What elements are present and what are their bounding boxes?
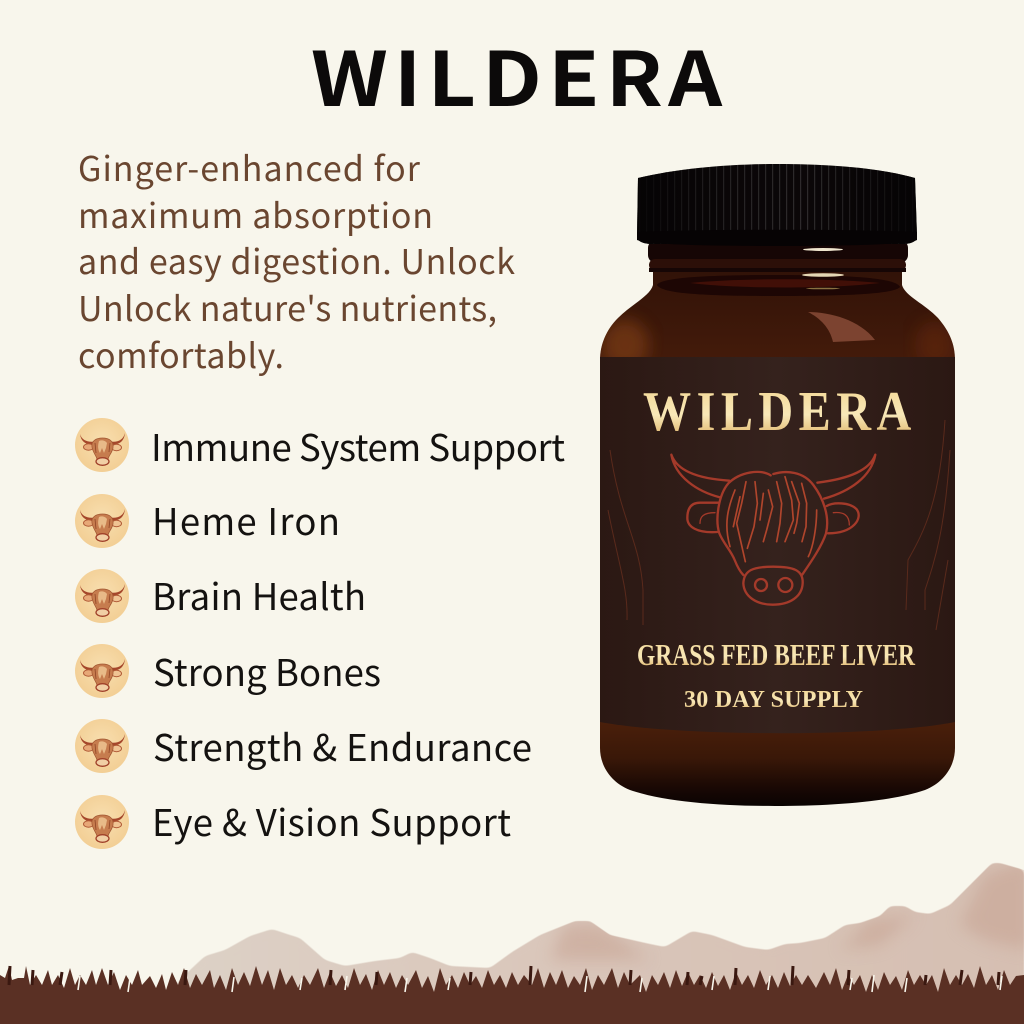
benefit: brain health: Brain Health [152, 568, 366, 621]
label [600, 357, 955, 733]
intro paragraph: Ginger-enhanced for [78, 142, 421, 191]
intro paragraph: and easy digestion. Unlock [78, 235, 515, 284]
mountains [175, 860, 1024, 995]
intro paragraph: comfortably. [78, 329, 284, 378]
benefit: heme iron [75, 493, 340, 548]
label faint side lines [608, 420, 950, 630]
benefits list [75, 418, 565, 849]
intro paragraph: maximum absorption [78, 189, 433, 238]
supplement bottle [600, 164, 955, 806]
neck rings [648, 240, 908, 263]
grass [0, 966, 1024, 1024]
bottle shoulder and neck [600, 245, 955, 730]
bottle base [600, 718, 955, 806]
bull hair strands [727, 477, 817, 562]
intro paragraph [78, 142, 515, 378]
benefit: heme iron: Heme Iron [152, 493, 340, 546]
label wordmark: WILDERA [643, 381, 912, 443]
benefit: immune system support: Immune System Support [151, 419, 565, 472]
grass highlights [78, 975, 1002, 992]
label supply count: 30 DAY SUPPLY [684, 687, 863, 713]
benefit: strength and endurance: Strength & Endurance [153, 719, 532, 772]
intro paragraph: Unlock nature's nutrients, [78, 282, 497, 331]
cap [637, 164, 917, 246]
label product name: GRASS FED BEEF LIVER [637, 637, 915, 672]
glass highlights [803, 248, 843, 251]
benefit: strong bones: Strong Bones [153, 644, 381, 697]
title: WILDERA [311, 19, 723, 128]
benefit: eye and vision support: Eye & Vision Support [152, 794, 511, 847]
bull emblem [671, 455, 875, 605]
